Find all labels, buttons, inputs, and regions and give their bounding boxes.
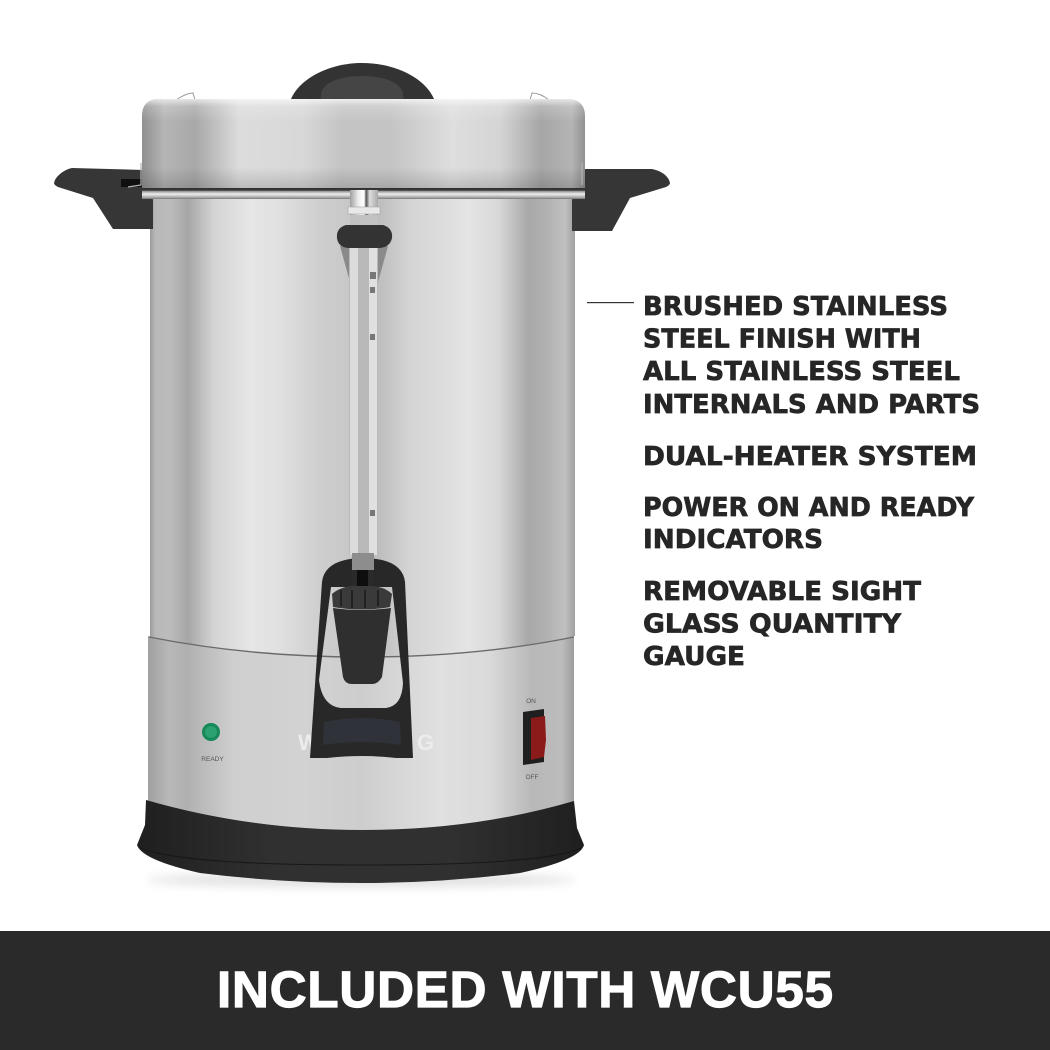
ready indicator: READY (201, 756, 224, 763)
feature: dual-heater system: DUAL-HEATER SYSTEM (643, 442, 977, 472)
power switch (523, 698, 546, 781)
feature: power on and ready indicators: POWER ON AND READY (643, 493, 975, 523)
spigot bracket (310, 558, 413, 758)
tap stem (352, 553, 374, 570)
bracket sheen (323, 718, 401, 745)
tap cone (333, 608, 391, 684)
urn body (150, 190, 575, 660)
logo: W (298, 730, 319, 755)
footer title: INCLUDED WITH WCU55 (217, 961, 833, 1018)
feature: brushed stainless steel: STEEL FINISH WITH (643, 324, 921, 354)
feature: removable sight glass (643, 577, 921, 672)
connector ribs (348, 207, 380, 214)
left handle (54, 168, 153, 229)
ribbed collar (332, 586, 392, 610)
callout leader line (587, 302, 634, 303)
scale labels (370, 272, 376, 516)
lower housing (148, 636, 574, 845)
product photo: coffee urn (54, 63, 670, 887)
sight gauge (337, 190, 392, 555)
gasket (337, 225, 392, 248)
logo: A (338, 730, 354, 755)
handle clips (121, 163, 582, 187)
right handle (572, 169, 670, 231)
ready indicator (201, 723, 224, 763)
feature: brushed stainless steel: INTERNALS AND PARTS (643, 390, 980, 420)
chrome connector (350, 190, 378, 226)
floor shadow (146, 873, 576, 887)
black base (137, 800, 584, 883)
tap (332, 553, 392, 684)
lid (142, 99, 585, 189)
feature: brushed stainless steel (643, 292, 980, 420)
logo: G (417, 730, 434, 755)
lid clips (176, 93, 549, 100)
feature: power on and ready indicators: INDICATORS (643, 525, 823, 555)
gauge shadow (340, 246, 388, 282)
sight glass tube (349, 245, 378, 555)
feature: brushed stainless steel: ALL STAINLESS STEEL (643, 357, 960, 387)
logo (298, 730, 434, 755)
feature: brushed stainless steel: BRUSHED STAINLESS (643, 292, 948, 322)
rim (142, 188, 585, 199)
seam line (149, 637, 574, 657)
feature: removable sight glass: GAUGE (643, 642, 745, 672)
power switch: OFF (526, 774, 539, 781)
footer band (0, 931, 1050, 1050)
lid knob (291, 63, 434, 99)
feature: removable sight glass: GLASS QUANTITY (643, 610, 902, 640)
feature: power on and ready indicators (643, 493, 975, 555)
power switch: ON (526, 698, 536, 705)
feature: removable sight glass: REMOVABLE SIGHT (643, 577, 921, 607)
logo: N (372, 730, 388, 755)
right tube wall (369, 245, 377, 555)
left tube wall (350, 245, 358, 555)
